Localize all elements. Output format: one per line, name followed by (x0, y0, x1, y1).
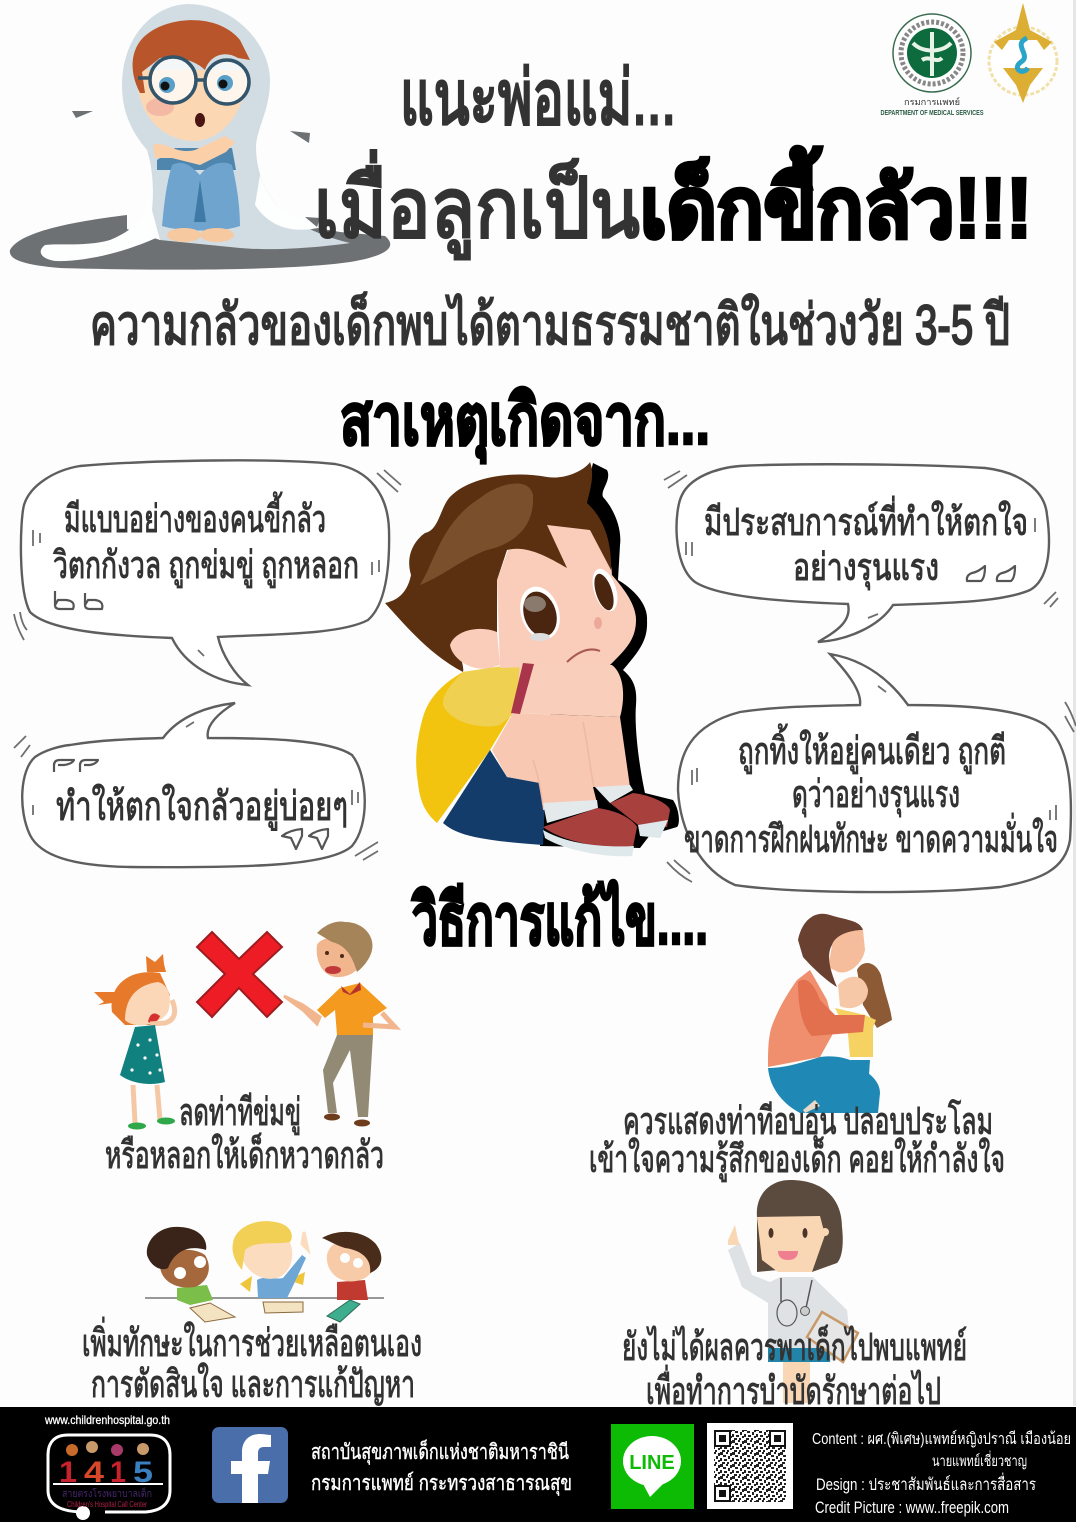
title (314, 56, 1032, 259)
text: reduce threats (105, 1092, 384, 1177)
title: เด็กขี้กลัว!!! (640, 146, 1032, 255)
illustration: crying boy (385, 462, 679, 856)
text: reduce threats: หรือหลอกให้เด็กหวาดกลัว (105, 1132, 384, 1177)
closing quote marks (282, 829, 328, 849)
speech bubble: frightened often: ทำให้ตกใจกลัวอยู่บ่อยๆ (56, 783, 348, 830)
logo: 1415 call center: 4 (84, 1456, 104, 1489)
logo: 1415 call center: 1 (59, 1456, 77, 1489)
text: institute name: สถาบันสุขภาพเด็กแห่งชาติมหาราชินี (311, 1438, 569, 1465)
text: reduce threats: ลดท่าทีข่มขู่ (179, 1092, 301, 1135)
speech bubble: shocking experience (664, 464, 1058, 642)
text: institute name: กรมการแพทย์ กระทรวงสาธารณสุข (311, 1471, 572, 1496)
illustration: scared boy under blanket (10, 4, 390, 270)
icon: facebook (212, 1427, 288, 1503)
footer bar (0, 1407, 1076, 1522)
text: add skills: เพิ่มทักษะในการช่วยเหลือตนเอง (82, 1317, 422, 1365)
title: เมื่อลูกเป็น (314, 150, 640, 259)
speech bubble: role model: วิตกกังวล ถูกข่มขู่ ถูกหลอก (53, 545, 359, 588)
text: credits: Credit Picture : www..freepik.com (815, 1498, 1009, 1517)
icon: line (611, 1424, 694, 1509)
speech bubble: abandoned, hit: ดุว่าอย่างรุนแรง (792, 774, 960, 817)
website url: www.childrenhospital.go.th (44, 1413, 170, 1427)
illustration: mother hugging child (768, 914, 892, 1113)
icon: line: LINE (629, 1452, 675, 1474)
speech bubble: shocking experience: อย่างรุนแรง (793, 547, 939, 590)
opening quote marks (55, 591, 102, 609)
speech bubble: role model (14, 460, 401, 685)
illustration: three children studying (145, 1221, 384, 1322)
illustration: doctor (728, 1180, 858, 1403)
logo: 1415 call center: Children's Hospital Call Center (67, 1500, 147, 1509)
logos: ministry and department: DEPARTMENT OF MEDICAL SERVICES (880, 110, 984, 117)
speech bubble: abandoned, hit (667, 654, 1076, 892)
illustration: adult scolding crying child with red cross (94, 922, 395, 1130)
speech bubble: frightened often (14, 703, 378, 867)
text: add skills (82, 1317, 422, 1406)
logos: ministry and department: กรมการแพทย์ (904, 96, 960, 107)
text: show warmth (589, 1099, 1005, 1182)
text: institute name (311, 1438, 572, 1496)
logo: 1415 call center: สายตรงโรงพยาบาลเด็ก (62, 1486, 152, 1500)
logos: ministry and department (880, 3, 1057, 117)
title: แนะพ่อแม่... (400, 56, 676, 141)
qr code (707, 1423, 793, 1509)
logo: 1415 call center: 5 (133, 1456, 153, 1489)
closing quote marks (967, 566, 1015, 581)
text: credits: นายแพทย์เชี่ยวชาญ (932, 1450, 1027, 1470)
heading: causes: สาเหตุเกิดจาก... (340, 381, 710, 464)
text: add skills: การตัดสินใจ และการแก้ปัญหา (91, 1363, 415, 1406)
logo: 1415 call center (48, 1435, 170, 1520)
opening quote marks (54, 760, 98, 772)
logo: 1415 call center: 1 (110, 1456, 126, 1489)
heading: solutions: วิธีการแก้ไข.... (411, 879, 708, 959)
text: credits (812, 1429, 1071, 1517)
speech bubble: role model: มีแบบอย่างของคนขี้กลัว (64, 491, 326, 541)
text: see doctor (622, 1324, 967, 1413)
